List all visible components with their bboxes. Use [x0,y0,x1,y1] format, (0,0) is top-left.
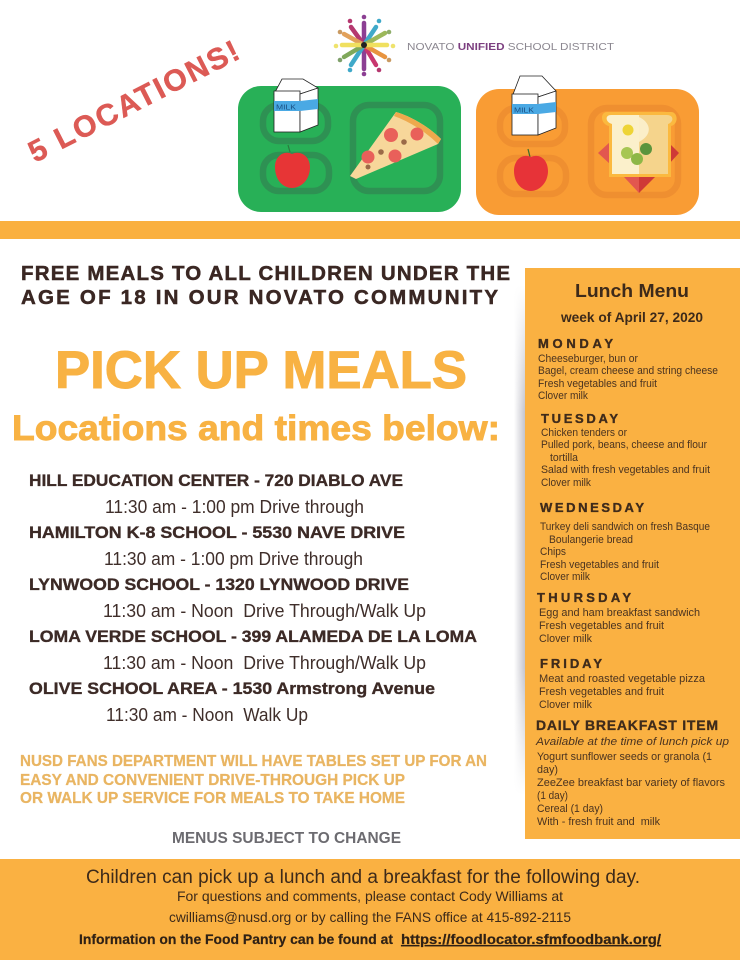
icon: apple on orange tray [514,149,548,191]
list: pick up locations: LYNWOOD SCHOOL - 1320 LYNWOOD DRIVE [29,575,409,594]
menu: Thursday: Egg and ham breakfast sandwich [539,607,700,619]
list: pick up locations: HAMILTON K-8 SCHOOL - 5530 NAVE DRIVE [29,523,405,542]
menu title: Lunch Menu [575,281,689,301]
list: pick up locations [29,471,477,725]
menu: daily breakfast item: (1 day) [537,790,568,802]
menu: Monday: Clover milk [538,390,588,402]
menu: daily breakfast item: Available at the time of lunch pick up [535,736,729,748]
list: pick up locations: OLIVE SCHOOL AREA - 1530 Armstrong Avenue [29,679,435,698]
icon: apple on green tray [275,145,310,188]
text block: NUSD FANS department [20,753,487,807]
menu: daily breakfast item [535,717,729,828]
list: pick up locations: LOMA VERDE SCHOOL - 399 ALAMEDA DE LA LOMA [29,627,477,646]
heading: free meals [21,262,510,309]
footer contact text: cwilliams@nusd.org or by calling the FANS office at 415-892-2115 [169,909,571,925]
logo: Novato Unified School District: NOVATO UNIFIED SCHOOL DISTRICT [407,41,615,53]
menu: Monday [538,336,718,402]
menu: Monday: Cheeseburger, bun or [538,353,638,365]
list: pick up locations: 11:30 am - 1:00 pm Drive through [105,497,364,517]
footer headline: Children can pick up a lunch and a breakfast for the following day. [86,867,640,888]
menu: Thursday: THURSDAY [537,590,631,605]
menu: daily breakfast item: With - fresh fruit and milk [537,816,660,828]
menu: Wednesday: Chips [540,546,566,558]
menu: Tuesday: Chicken tenders or [541,427,627,439]
menu: Friday: FRIDAY [540,656,602,671]
logo: Novato Unified School District [334,15,615,76]
list: pick up locations: HILL EDUCATION CENTER - 720 DIABLO AVE [29,471,403,490]
icon: orange lunch tray [476,76,699,215]
panel: lunch menu [525,268,740,839]
text block: NUSD FANS department: OR WALK UP SERVICE FOR MEALS TO TAKE HOME [20,790,405,807]
menu: Tuesday: TUESDAY [541,411,618,426]
menu: Thursday: Clover milk [539,633,592,645]
menu: daily breakfast item: Yogurt sunflower seeds or granola (1 [537,751,712,763]
menu: Thursday: Fresh vegetables and fruit [539,620,664,632]
menu: Friday: Fresh vegetables and fruit [539,686,664,698]
footer food pantry link: https://foodlocator.sfmfoodbank.org/ [401,931,661,947]
menu: Tuesday: Salad with fresh vegetables and fruit [541,464,710,476]
menu: Friday: Clover milk [539,699,592,711]
menu: Wednesday [540,500,710,583]
menu: Wednesday: Boulangerie bread [549,534,633,546]
icon: milk carton on green tray [274,79,318,132]
menu: daily breakfast item: ZeeZee breakfast bar variety of flavors [537,777,725,789]
menu: Friday: Meat and roasted vegetable pizza [539,673,706,685]
list: pick up locations: 11:30 am - 1:00 pm Drive through [104,549,363,569]
footer food pantry link: Information on the Food Pantry can be found at [79,931,393,947]
icon: milk carton on orange tray: MILK [514,106,534,114]
menu: daily breakfast item: DAILY BREAKFAST ITEM [536,717,718,733]
heading: free meals: AGE OF 18 IN OUR NOVATO COMMUNITY [21,286,498,309]
menu: Tuesday [541,411,710,489]
menu: Monday: Bagel, cream cheese and string cheese [538,365,718,377]
menu date: week of April 27, 2020 [560,309,703,325]
menu: Tuesday: Pulled pork, beans, cheese and flour [541,439,707,451]
menu: Wednesday: WEDNESDAY [540,500,644,515]
menu: Wednesday: Fresh vegetables and fruit [540,559,659,571]
text block: NUSD FANS department: NUSD FANS DEPARTMENT WILL HAVE TABLES SET UP FOR AN [20,753,487,770]
callout: 5 locations: 5 LOCATIONS! [23,35,245,169]
heading: free meals: FREE MEALS TO ALL CHILDREN UNDER THE [21,262,510,285]
footer contact text: For questions and comments, please contact Cody Williams at [177,888,563,904]
heading: pick up meals: PICK UP MEALS [55,341,467,400]
subheading: locations and times: Locations and times below: [12,409,500,448]
list: pick up locations: 11:30 am - Noon Drive Through/Walk Up [103,601,426,621]
note: menus subject to change: MENUS SUBJECT TO CHANGE [172,830,401,847]
menu: Wednesday: Turkey deli sandwich on fresh Basque [540,521,710,533]
top orange band [0,221,740,239]
text block: NUSD FANS department: EASY AND CONVENIENT DRIVE-THROUGH PICK UP [20,772,405,789]
menu: Tuesday: Clover milk [541,477,591,489]
menu: daily breakfast item: day) [537,764,558,776]
menu: Tuesday: tortilla [550,452,579,464]
panel: footer band [0,859,740,960]
menu: Monday: Fresh vegetables and fruit [538,378,657,390]
footer food pantry link [79,931,661,947]
icon: sandwich [598,112,679,193]
icon: pizza slice [350,112,441,179]
menu: Friday [539,656,706,711]
list: pick up locations: 11:30 am - Noon Walk Up [106,705,308,725]
list: pick up locations: 11:30 am - Noon Drive Through/Walk Up [103,653,426,673]
menu: Thursday [537,590,700,645]
icon: milk carton on green tray: MILK [276,102,296,112]
menu: Wednesday: Clover milk [540,571,590,583]
menu: daily breakfast item: Cereal (1 day) [537,803,603,815]
footer contact text [169,888,571,925]
icon: green lunch tray [238,79,461,212]
menu: Monday: MONDAY [538,336,613,351]
icon: milk carton on orange tray [512,76,556,135]
